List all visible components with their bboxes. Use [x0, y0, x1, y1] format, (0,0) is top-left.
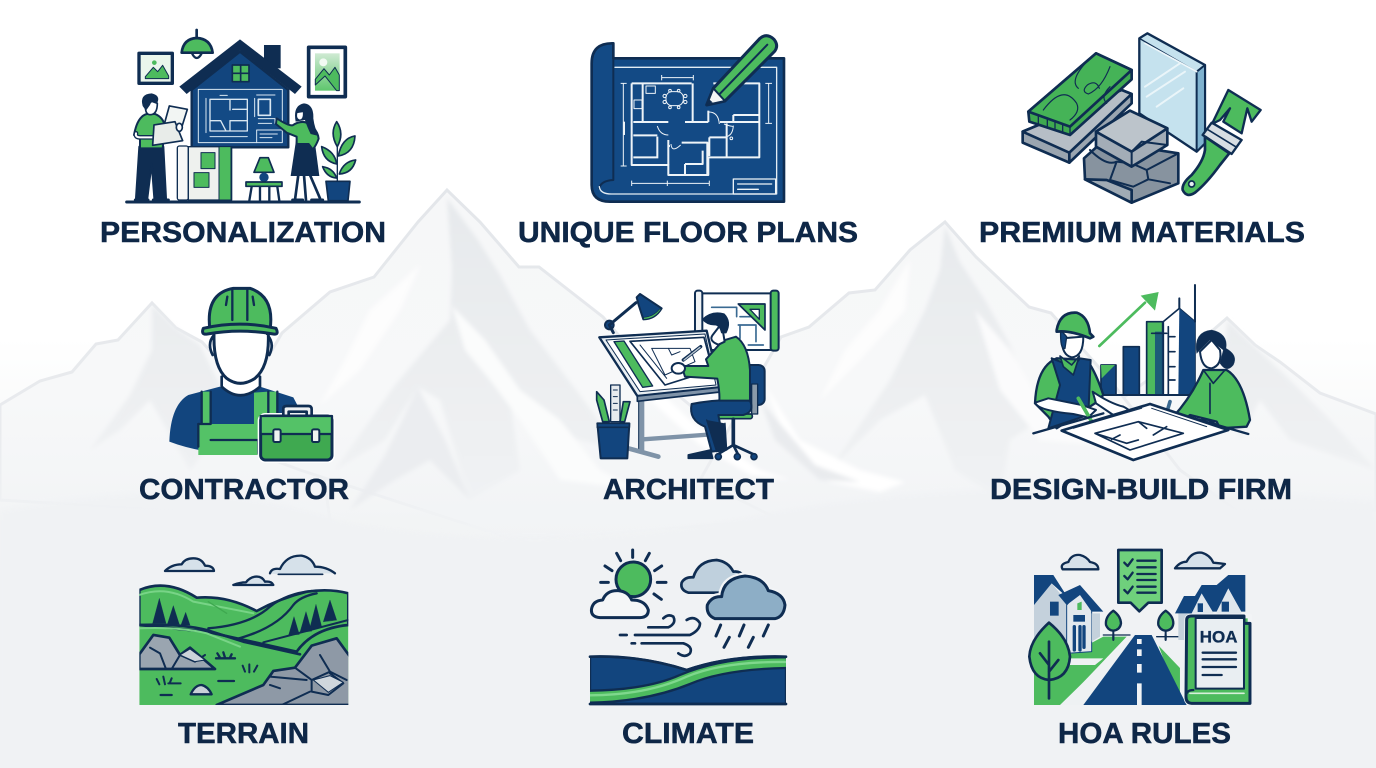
label: personalization: PERSONALIZATION	[100, 217, 386, 249]
rocks left	[139, 635, 215, 669]
icon: house	[179, 39, 302, 147]
icon: designer	[1162, 330, 1250, 430]
icon: large tree	[1029, 623, 1070, 698]
icon: pendant lamp	[182, 30, 213, 58]
panel: design-build firm	[990, 285, 1292, 506]
panel: contractor	[139, 288, 349, 506]
icon: chair	[715, 365, 765, 460]
torso	[169, 387, 302, 455]
mountain: right center	[700, 222, 1250, 530]
icon: checklist bubble	[1118, 550, 1162, 611]
panel: architect	[597, 291, 779, 506]
icon: wind	[620, 615, 700, 656]
icon: back cloud	[681, 560, 743, 593]
label: premium materials: PREMIUM MATERIALS	[979, 217, 1305, 249]
icon: stones	[1084, 111, 1178, 203]
icon: hills and rocks	[139, 586, 350, 705]
icon: pencil	[707, 36, 777, 105]
floor plan	[621, 75, 772, 186]
icon: woman pointing	[276, 103, 323, 200]
icon: hills landscape	[139, 556, 350, 705]
mountain base snowfield	[0, 487, 1376, 768]
blueprint sheet	[592, 43, 784, 202]
icon: hard hat	[203, 288, 277, 334]
icon: boxes and roll	[177, 146, 232, 200]
label: contractor: CONTRACTOR	[139, 474, 349, 506]
icon: gray plank	[1023, 90, 1132, 163]
icon: skyline bars	[1100, 285, 1197, 395]
label: hoa rules: HOA RULES	[1058, 718, 1231, 750]
panel: unique floor plans	[518, 36, 858, 249]
icon: HOA book	[1186, 616, 1250, 703]
icon: plan on table	[1033, 404, 1248, 460]
icon: clouds	[165, 556, 335, 585]
icon: drafting table	[599, 331, 720, 457]
icon: contractor with toolbox	[169, 288, 332, 460]
icon: builder	[1035, 313, 1135, 428]
icon: paint brush	[1183, 90, 1261, 195]
grass and stone	[216, 652, 235, 658]
icon: neighbourhood with HOA book	[1029, 550, 1250, 705]
icon: tall framed picture	[309, 47, 345, 97]
icon: rolling ground	[590, 656, 786, 704]
panel: hoa rules	[1029, 550, 1250, 750]
icon: green ground and road	[1034, 635, 1187, 705]
icon: white cloud	[591, 591, 648, 618]
icon: blueprint and pencil	[592, 36, 784, 202]
panel: premium materials	[979, 33, 1305, 249]
icon: small trees	[1106, 611, 1173, 640]
rocks right	[217, 638, 350, 705]
icon: glass pane	[1139, 33, 1205, 152]
head	[210, 335, 272, 396]
icon: desk lamp	[605, 294, 662, 333]
label: climate: CLIMATE	[622, 718, 754, 750]
mountain: far left	[0, 303, 330, 520]
icon: sun	[601, 550, 666, 599]
mountain: central	[220, 190, 850, 540]
panel: climate	[590, 550, 786, 750]
mountain: far right	[1050, 318, 1376, 510]
icon: clouds	[1062, 553, 1225, 569]
icon: wall blueprint	[695, 291, 779, 351]
icon: potted plant	[322, 122, 356, 201]
icon: toolbox	[261, 406, 332, 460]
icon: weather	[590, 550, 786, 704]
icon: builder and designer with skyline	[1033, 285, 1250, 460]
label: architect: ARCHITECT	[603, 474, 774, 506]
icon: pencil cup	[597, 385, 630, 458]
icon: man with plan	[134, 93, 187, 200]
icon: green plank	[1028, 53, 1132, 135]
icon: rain cloud	[707, 576, 785, 619]
icon: right houses	[1175, 575, 1245, 640]
label: unique floor plans: UNIQUE FLOOR PLANS	[518, 217, 858, 249]
title block	[733, 179, 776, 194]
mountain range backdrop	[0, 190, 1376, 768]
icon: architect at drafting table	[597, 291, 779, 460]
label: terrain: TERRAIN	[178, 718, 309, 750]
icon: left houses	[1034, 575, 1103, 653]
panel: terrain	[139, 556, 350, 750]
icon: architect figure	[672, 313, 751, 458]
label: design-build firm: DESIGN-BUILD FIRM	[990, 474, 1292, 506]
icon: HOA book: HOA	[1200, 628, 1238, 647]
blueprint on house	[198, 89, 282, 143]
panel: personalization	[100, 30, 386, 249]
icon: materials stack	[1023, 33, 1261, 203]
icon: house and couple planning	[127, 30, 359, 202]
mountain shading	[90, 198, 1376, 510]
icon: side table with lamp	[246, 158, 282, 201]
icon: small framed picture	[139, 53, 172, 83]
icon: rain	[716, 625, 768, 647]
icon: rising arrow	[1099, 292, 1159, 346]
